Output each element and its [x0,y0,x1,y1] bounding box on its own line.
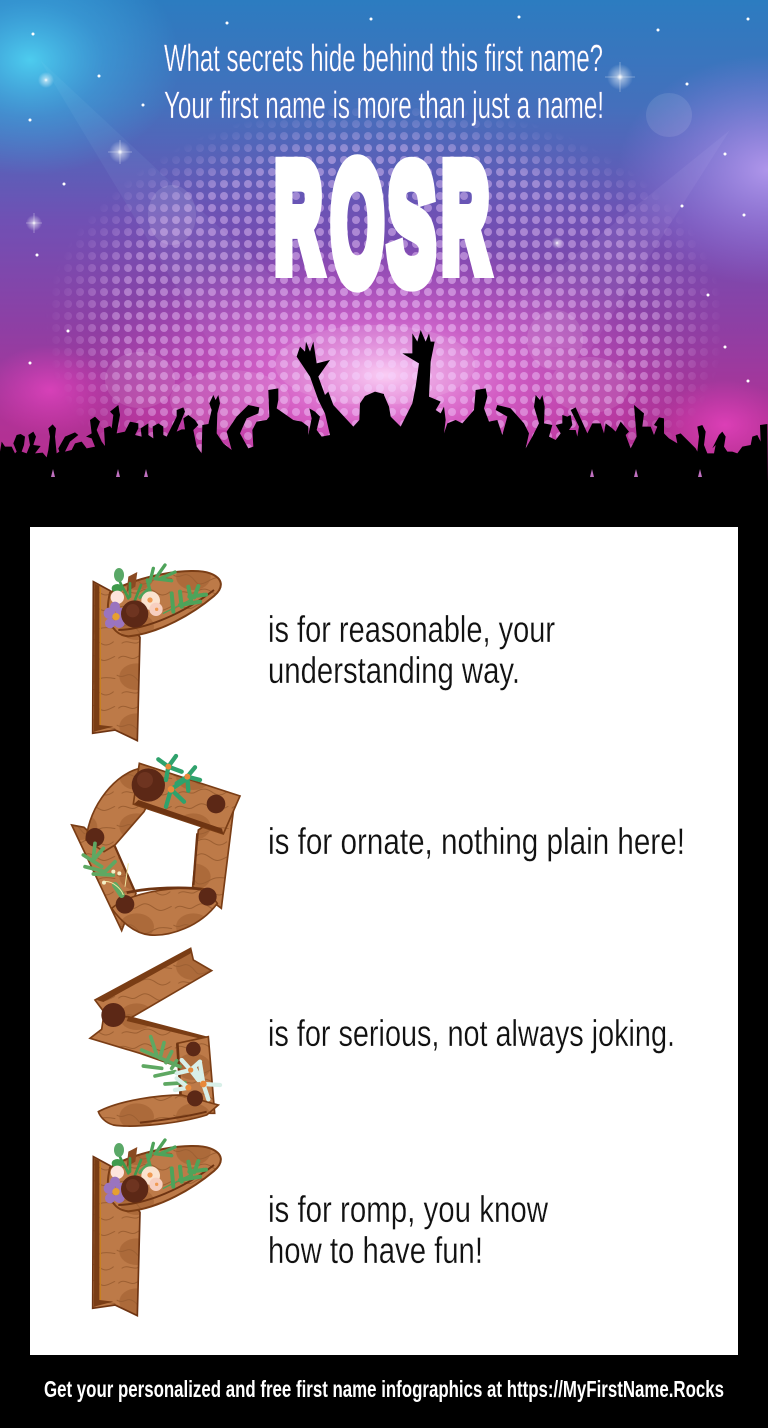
line: R meaning again: is for romp, you know [268,1189,548,1230]
title: name ROSR: R [442,134,489,301]
title: name ROSR: O [331,130,384,319]
heading: intro lines [164,38,604,127]
line: R meaning again: how to have fun! [268,1230,483,1271]
title: name ROSR: R [275,134,322,301]
letter R: wood letter with flowers [93,565,221,741]
panel: white card [30,527,738,1355]
line: R meaning again [268,1189,548,1271]
letter S: wood letter with flowers [90,948,220,1126]
line: R meaning [268,609,555,691]
title: name ROSR: S [388,132,435,316]
line: R meaning: is for reasonable, your [268,609,555,650]
title: name ROSR [275,130,489,319]
line: R meaning: understanding way. [268,650,520,691]
letter R: repeated wood letter [93,1140,221,1316]
background: stage lights [0,0,768,527]
letter O: wood letter with flowers [72,756,240,935]
crowd silhouette [0,330,768,530]
